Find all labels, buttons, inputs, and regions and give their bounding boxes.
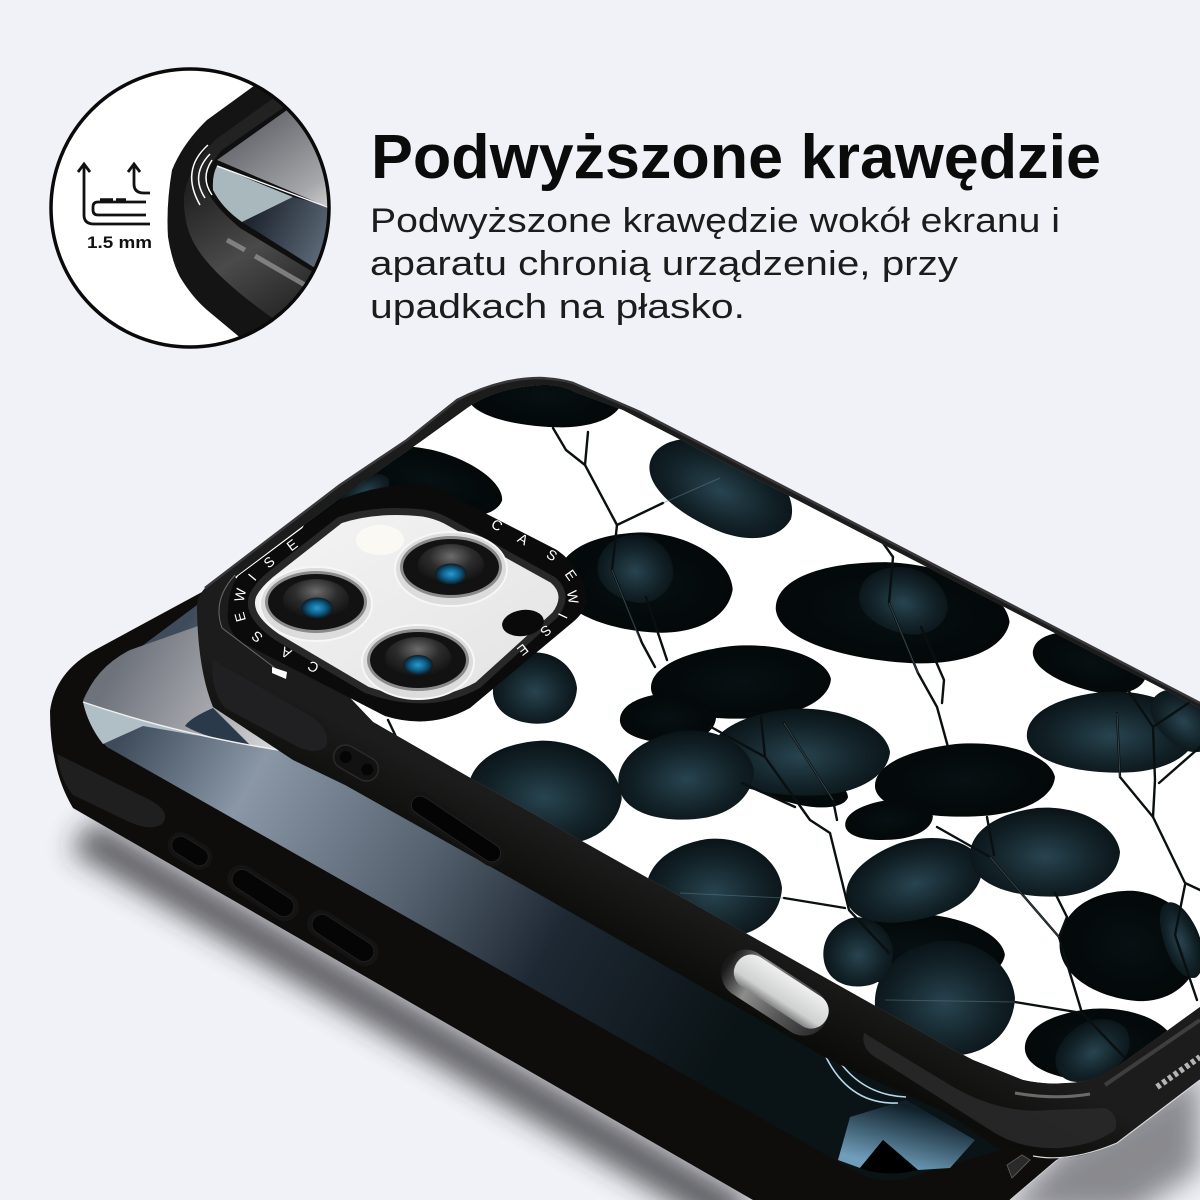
clear camera window with bevel — [251, 512, 562, 700]
case corner close-up — [168, 86, 328, 336]
CASEWISE ring lettering: S — [544, 546, 560, 564]
CASEWISE ring lettering: W — [564, 589, 582, 606]
CASEWISE ring lettering: E — [283, 536, 301, 554]
CASEWISE ring lettering — [231, 516, 582, 676]
lower phone: front with raised screen edge — [50, 585, 1059, 1200]
CASEWISE ring lettering: I — [245, 570, 259, 584]
CASEWISE ring lettering: S — [260, 553, 278, 571]
outer thin edge highlight — [1033, 1080, 1200, 1158]
dark leaves — [293, 359, 1200, 1082]
CASEWISE ring lettering: I — [555, 611, 571, 621]
stems — [388, 428, 1200, 1057]
lower side buttons — [163, 827, 384, 972]
CASEWISE ring lettering: E — [514, 641, 532, 659]
screen wallpaper wave — [83, 620, 290, 751]
CASEWISE ring lettering: W — [231, 586, 249, 603]
tab, upper left — [212, 660, 327, 751]
upper phone: back with leaf-print case — [197, 359, 1200, 1158]
description text: upadkach na płasko. — [370, 288, 745, 326]
CASEWISE ring lettering: A — [278, 643, 294, 662]
CASEWISE ring lettering: S — [537, 622, 555, 640]
CASEWISE ring lettering: A — [515, 530, 532, 549]
drop shadow under phones — [70, 820, 1200, 1200]
leaf veins — [612, 478, 1120, 1002]
lens: left — [260, 567, 372, 641]
description text: Podwyższone krawędzie wokół ekranu i — [370, 202, 1060, 240]
lower port detail — [1007, 1155, 1030, 1178]
CASEWISE ring lettering: E — [562, 567, 580, 583]
corner speaker detail — [1157, 1057, 1200, 1087]
lens: top right — [395, 532, 507, 606]
title: Podwyższone krawędzie — [371, 123, 1101, 192]
CASEWISE ring lettering: C — [305, 658, 321, 676]
bump rim — [228, 485, 587, 721]
impact arcs — [192, 145, 212, 205]
CASEWISE ring lettering: S — [248, 628, 266, 646]
teal leaves — [336, 417, 1200, 1094]
cutout edge line around bump — [219, 575, 275, 668]
description text — [370, 202, 1060, 326]
charging port — [712, 940, 837, 1045]
white panel chip — [272, 667, 287, 679]
detail circle: raised edge close-up — [51, 69, 340, 347]
leaf print panel — [235, 359, 1200, 1094]
lower case frame — [50, 585, 1059, 1200]
CASEWISE ring lettering: C — [489, 516, 505, 534]
lower case translucent tab — [57, 754, 165, 827]
rim highlight along panel — [1015, 1093, 1090, 1097]
lower screen — [83, 605, 1000, 1180]
icon: 1.5 mm edge diagram — [78, 164, 150, 224]
upper case frame — [197, 378, 1200, 1158]
lens: bottom — [362, 625, 474, 699]
camera bump — [219, 485, 587, 721]
description text: aparatu chronią urządzenie, przy — [370, 245, 958, 283]
lower case edge highlight — [1010, 1160, 1057, 1200]
microphone hole — [500, 607, 546, 639]
flash — [356, 525, 404, 555]
tab, bottom corner — [863, 1033, 1116, 1148]
upper side buttons — [329, 741, 511, 872]
case outer edge highlight — [205, 378, 1200, 703]
screen glow bottom — [838, 1100, 975, 1170]
label: 1.5 mm: 1.5 mm — [87, 233, 152, 252]
CASEWISE ring lettering: E — [231, 610, 249, 624]
